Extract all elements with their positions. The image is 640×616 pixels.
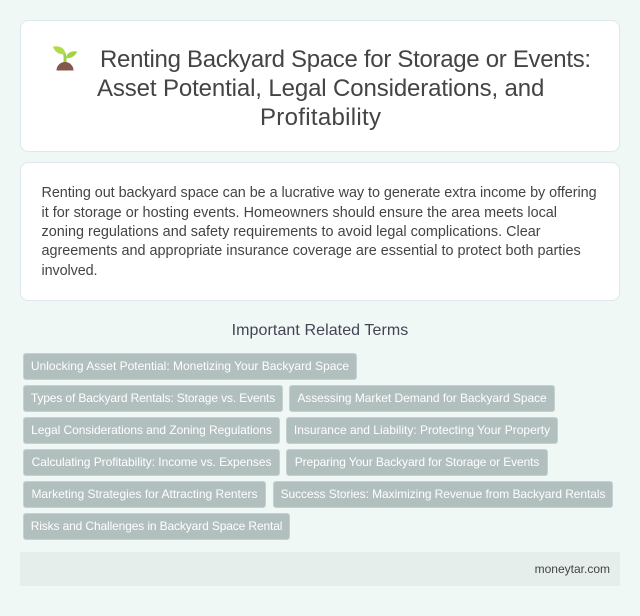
tag: Assessing Market Demand for Backyard Space [297,391,547,405]
icon: sprout [53,46,77,70]
tag [23,513,290,540]
tag: Calculating Profitability: Income vs. Expenses [32,455,271,469]
description text: it for storage or hosting events. Homeowners should ensure the area meets local [42,205,557,221]
title text [97,46,591,131]
footer source: moneytar.com [535,562,610,576]
description text: zoning regulations and safety requirements to avoid legal complications. Clear [42,224,541,240]
description text [42,185,597,279]
description text: Renting out backyard space can be a lucrative way to generate extra income by offering [42,185,597,201]
description text: agreements and appropriate insurance coverage are essential to protect both parties [42,243,581,259]
tag [286,417,558,444]
tag: Unlocking Asset Potential: Monetizing Your Backyard Space [31,359,349,373]
tag [23,353,357,380]
tag: Success Stories: Maximizing Revenue from Backyard Rentals [281,487,605,501]
description text: involved. [42,263,97,279]
title card [20,20,620,152]
tag: Marketing Strategies for Attracting Renters [31,487,258,501]
tag [23,385,283,412]
tag [289,385,555,412]
footer bar [20,552,620,586]
tag: Preparing Your Backyard for Storage or Events [295,455,539,469]
tag [23,481,266,508]
tag: Types of Backyard Rentals: Storage vs. Events [31,391,275,405]
tags list [23,353,613,540]
section heading: Important Related Terms [232,322,408,339]
title text: Renting Backyard Space for Storage or Events: [100,46,591,73]
description card [20,162,620,301]
title text: Profitability [260,104,381,131]
tag [23,417,280,444]
title text: Asset Potential, Legal Considerations, and [97,75,544,102]
tag: Insurance and Liability: Protecting Your Property [294,423,550,437]
tag [273,481,613,508]
tag [286,449,548,476]
tag [23,449,280,476]
tag: Risks and Challenges in Backyard Space Rental [31,519,282,533]
tag: Legal Considerations and Zoning Regulations [31,423,272,437]
